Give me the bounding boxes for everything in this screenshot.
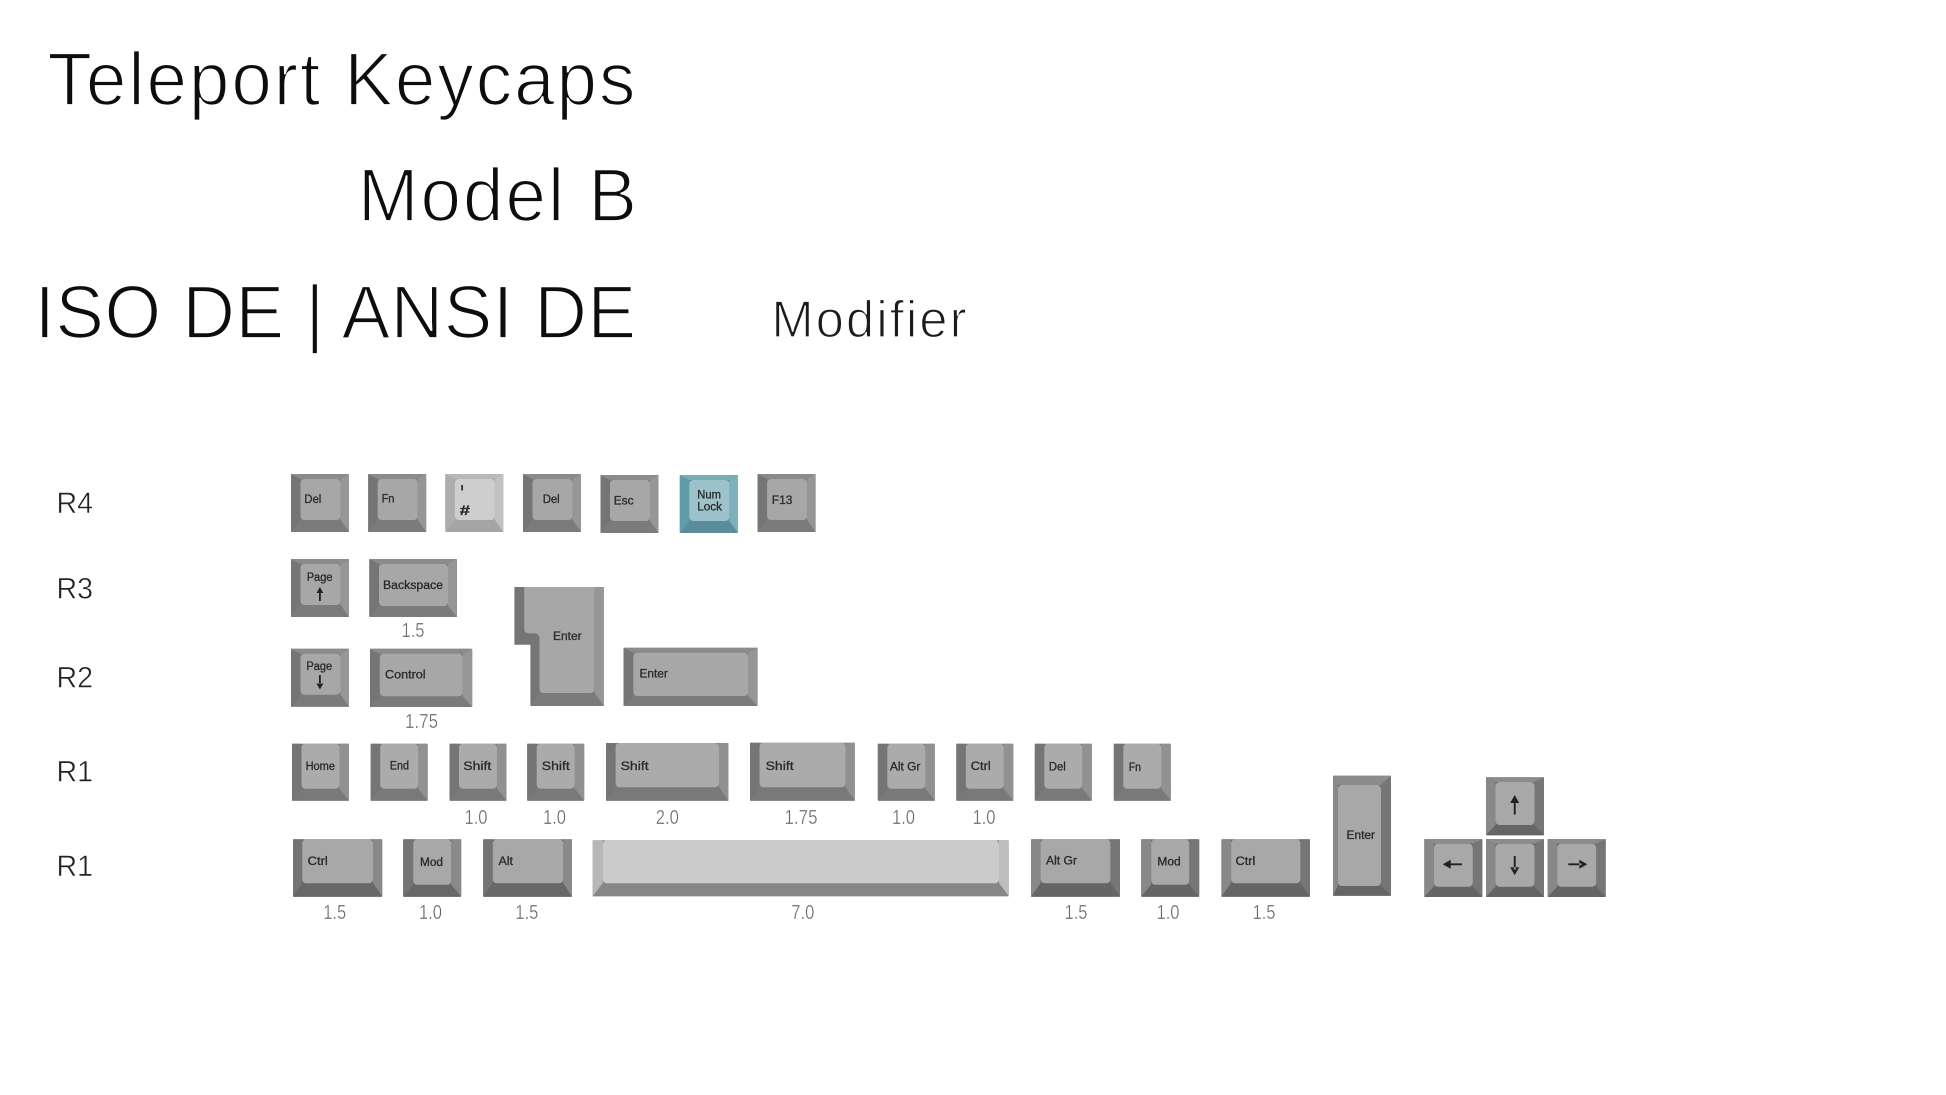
key: Esc: Esc — [614, 496, 634, 508]
key: Del R1 — [1035, 744, 1092, 801]
row label R4: R4 — [56, 487, 93, 520]
key: Del R4 — [291, 474, 349, 532]
key: Esc — [600, 475, 658, 533]
key: Alt Gr 1.5: Alt Gr — [1046, 856, 1077, 868]
key: Shift 2.0: Shift — [621, 761, 650, 773]
key: Shift 1.75: Shift — [766, 761, 795, 773]
row label R3: R3 — [56, 572, 93, 606]
row label R2: R2 — [56, 662, 93, 694]
key: Page up: Page — [307, 572, 332, 584]
key: Mod left: Mod — [420, 857, 443, 869]
key: Num Lock teal: Num — [697, 490, 721, 502]
key: Ctrl 1.5: Ctrl — [308, 856, 328, 868]
key: tall Enter — [1333, 776, 1391, 896]
key: arrow down — [1486, 839, 1544, 897]
key: Shift 1.0 second: Shift — [542, 761, 571, 773]
key: hash light — [445, 474, 503, 532]
key: ANSI Enter: Enter — [640, 668, 668, 680]
key: F13: F13 — [772, 495, 792, 507]
key: ANSI Enter — [624, 648, 758, 706]
key: Control — [370, 649, 472, 707]
key: Shift 1.75 — [750, 743, 855, 801]
key: Ctrl 1.5 right: Ctrl — [1236, 856, 1255, 868]
key: Alt 1.5: Alt — [499, 856, 514, 868]
key: Mod left — [403, 839, 461, 897]
width label 1.5: 1.5 — [1252, 902, 1276, 924]
key: Del R4 second: Del — [543, 494, 560, 506]
key: Backspace: Backspace — [383, 580, 443, 592]
key: Spacebar — [593, 840, 1009, 896]
key: Mod right — [1141, 839, 1199, 897]
width label 7.0: 7.0 — [791, 902, 814, 924]
key: Fn R1 — [1114, 744, 1171, 801]
width label 1.0: 1.0 — [972, 807, 996, 829]
title: ISO DE | ANSI DE: ISO DE | ANSI DE — [35, 270, 636, 354]
width label 1.75: 1.75 — [405, 711, 438, 733]
width label 1.5: 1.5 — [1064, 902, 1088, 924]
key: Fn R1: Fn — [1129, 762, 1141, 774]
key: Home: Home — [306, 761, 335, 773]
key: Home — [292, 744, 349, 801]
width label 1.0: 1.0 — [543, 807, 566, 829]
key: Fn R4 — [368, 474, 426, 532]
key: Control: Control — [385, 669, 426, 681]
key: Ctrl 1.5 right — [1221, 839, 1310, 897]
key: Shift 2.0 — [606, 743, 728, 801]
row label R1 upper: R1 — [56, 756, 93, 788]
width label 1.5: 1.5 — [515, 902, 538, 924]
key: Del R1: Del — [1049, 762, 1066, 774]
title: Teleport Keycaps: Teleport Keycaps — [48, 37, 635, 121]
width label 1.0: 1.0 — [464, 807, 488, 829]
key: Mod right: Mod — [1157, 856, 1181, 868]
width label 2.0: 2.0 — [656, 807, 679, 829]
key: Ctrl 1.0: Ctrl — [971, 761, 991, 773]
key: hash light: # — [460, 502, 470, 518]
key: Shift 1.0: Shift — [463, 761, 492, 773]
key: arrow up — [1486, 777, 1544, 835]
title: Model B: Model B — [358, 153, 637, 237]
key: Alt 1.5 — [483, 839, 572, 897]
width label 1.5: 1.5 — [402, 620, 424, 642]
row label R1 lower: R1 — [56, 850, 93, 883]
key: Page up — [291, 559, 349, 617]
key: End — [371, 744, 428, 801]
key: Del R4 second — [523, 474, 581, 532]
width label 1.5: 1.5 — [323, 902, 346, 924]
key: End: End — [390, 760, 409, 772]
key: Num Lock teal: Lock — [697, 502, 722, 514]
key: ISO Enter: Enter — [553, 631, 582, 643]
width label 1.0: 1.0 — [1156, 902, 1180, 924]
key: Ctrl 1.5 — [293, 839, 382, 897]
key: arrow left — [1424, 839, 1482, 897]
key: tall Enter: Enter — [1346, 830, 1375, 842]
key: Alt Gr 1.0: Alt Gr — [890, 761, 921, 773]
key: arrow right — [1548, 839, 1606, 897]
key: Page down: Page — [306, 661, 332, 673]
key: Alt Gr 1.5 — [1031, 839, 1120, 897]
heading: Modifier: Modifier — [772, 290, 967, 348]
key: Backspace — [369, 559, 457, 617]
key: Del R4: Del — [304, 494, 321, 506]
key: Shift 1.0 — [450, 744, 506, 801]
width label 1.0: 1.0 — [419, 902, 442, 924]
key: Page down — [291, 649, 349, 707]
key: Shift 1.0 second — [527, 744, 584, 801]
key: Alt Gr 1.0 — [878, 744, 935, 801]
width label 1.75: 1.75 — [784, 807, 818, 829]
key: Fn R4: Fn — [382, 493, 394, 505]
key: Ctrl 1.0 — [956, 744, 1013, 801]
key: Num Lock teal — [680, 475, 738, 533]
key: ISO Enter — [514, 587, 604, 706]
width label 1.0: 1.0 — [892, 807, 915, 829]
key: F13 — [758, 474, 816, 532]
